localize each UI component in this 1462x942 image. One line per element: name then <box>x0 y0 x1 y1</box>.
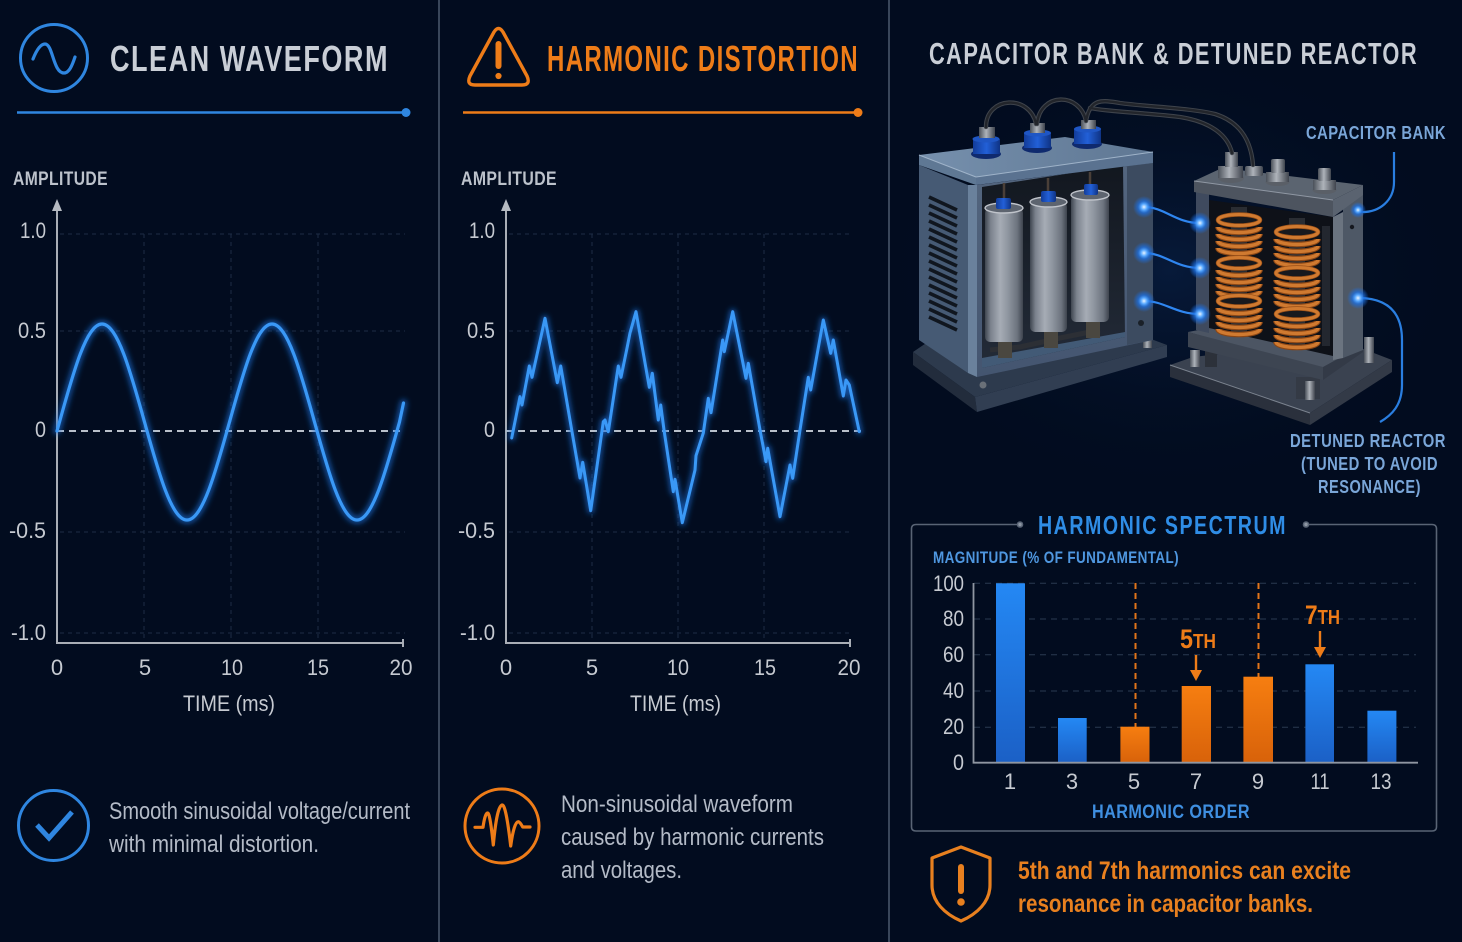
bar: order 9 <box>1243 677 1273 763</box>
y tick labels <box>458 218 495 645</box>
y axis values: 80 <box>943 606 964 631</box>
icon: warning triangle <box>469 28 528 85</box>
annotation: 5th: 5TH <box>1180 624 1216 654</box>
y tick labels: -0.5 <box>458 518 495 543</box>
x axis values: 13 <box>1370 769 1392 794</box>
x tick labels: 15 <box>307 655 329 680</box>
line chart: clean sine waveform <box>9 169 412 716</box>
reactor legs and bolts <box>1190 337 1374 400</box>
x tick labels: 20 <box>838 655 860 680</box>
clean sine curve <box>57 324 404 520</box>
illustration: detuned reactor <box>1170 152 1392 425</box>
y axis values: 100 <box>933 571 964 596</box>
glowing connections between units <box>1133 196 1211 325</box>
capacitor cylinders <box>985 172 1109 358</box>
heading: clean waveform: CLEAN WAVEFORM <box>110 38 389 79</box>
y axis with arrow <box>501 199 850 647</box>
x tick labels <box>51 655 412 680</box>
text: resonance warning <box>1018 857 1351 918</box>
text: clean waveform description: Smooth sinusoidal voltage/current <box>109 798 410 825</box>
zero reference line <box>506 430 866 432</box>
y tick labels: 1.0 <box>20 218 46 243</box>
x axis values <box>1004 769 1392 794</box>
y tick labels: 0 <box>484 417 495 442</box>
y tick labels: 0.5 <box>467 318 495 343</box>
cabinet terminals <box>971 120 1102 159</box>
annotation: 5th <box>1180 624 1216 681</box>
x axis values: 1 <box>1004 769 1016 794</box>
bar: order 13 <box>1367 711 1396 763</box>
y axis values: 40 <box>943 678 964 703</box>
bar: order 1 <box>996 583 1025 763</box>
y tick labels: 0 <box>35 417 46 442</box>
chart frame <box>912 522 1436 831</box>
axis label: amplitude: AMPLITUDE <box>461 169 557 190</box>
callout: detuned reactor: RESONANCE) <box>1318 477 1421 497</box>
x axis values: 5 <box>1128 769 1140 794</box>
y tick labels: -1.0 <box>460 620 495 645</box>
text: resonance warning: resonance in capacitor banks. <box>1018 890 1313 918</box>
cabinet vent slots <box>929 197 957 330</box>
heading rule <box>463 108 862 117</box>
y tick labels <box>9 218 46 645</box>
annotation: 7th <box>1305 600 1340 658</box>
axis label: time: TIME (ms) <box>183 691 275 716</box>
y tick labels: 0.5 <box>18 318 46 343</box>
zero reference line <box>57 430 403 432</box>
text: distortion description: Non-sinusoidal waveform <box>561 791 793 818</box>
y tick labels: -1.0 <box>11 620 46 645</box>
x tick labels: 10 <box>667 655 689 680</box>
text: clean waveform description: with minimal distortion. <box>108 831 319 858</box>
y axis values: 60 <box>943 642 964 667</box>
resonance dashed markers <box>1136 583 1258 727</box>
x axis values: 3 <box>1066 769 1078 794</box>
axis label: amplitude: AMPLITUDE <box>13 169 108 190</box>
reactor copper coils <box>1218 207 1318 348</box>
x tick labels: 0 <box>500 655 512 680</box>
heading: harmonic spectrum: HARMONIC SPECTRUM <box>1038 510 1287 540</box>
x axis values: 7 <box>1190 769 1202 794</box>
x axis title: HARMONIC ORDER <box>1092 802 1250 823</box>
callout: detuned reactor <box>1290 287 1446 497</box>
text: resonance warning: 5th and 7th harmonics can excite <box>1018 857 1351 885</box>
axis label: time: TIME (ms) <box>630 691 721 716</box>
panel: capacitor bank and detuned reactor <box>912 36 1446 921</box>
callout: capacitor bank <box>1306 123 1446 218</box>
heading rule <box>17 108 410 117</box>
distorted curve <box>512 312 859 523</box>
x tick labels <box>500 655 860 680</box>
y axis values <box>933 571 964 775</box>
chart axes <box>974 583 1418 763</box>
x tick labels: 5 <box>586 655 598 680</box>
text: distortion description: and voltages. <box>561 857 682 884</box>
annotation: 7th: 7TH <box>1305 600 1340 630</box>
x tick labels: 10 <box>221 655 243 680</box>
bar: order 5 <box>1120 727 1150 763</box>
x tick labels: 0 <box>51 655 63 680</box>
panel: harmonic distortion <box>458 28 866 884</box>
text: distortion description: caused by harmonic currents <box>561 824 824 851</box>
cables between terminals <box>986 100 1253 165</box>
x tick labels: 15 <box>754 655 776 680</box>
panel: clean waveform <box>9 24 412 860</box>
y tick labels: 1.0 <box>469 218 495 243</box>
illustration: capacitor bank cabinet <box>913 120 1167 412</box>
panel: harmonic spectrum chart <box>912 510 1436 831</box>
icon: warning shield <box>932 847 990 921</box>
y tick labels: -0.5 <box>9 518 46 543</box>
x tick labels: 5 <box>139 655 151 680</box>
bar: order 3 <box>1058 718 1087 763</box>
y axis values: 0 <box>953 750 964 775</box>
line chart: distorted waveform <box>458 169 866 716</box>
x axis values: 9 <box>1252 769 1264 794</box>
reactor terminals <box>1218 152 1336 194</box>
icon: sine wave in circle <box>20 24 88 92</box>
text: clean waveform description <box>108 798 410 858</box>
y axis title: MAGNITUDE (% OF FUNDAMENTAL) <box>933 548 1179 567</box>
text: distortion description <box>561 791 824 884</box>
bar: order 11 <box>1305 664 1334 763</box>
bar: order 7 <box>1182 686 1211 763</box>
x tick labels: 20 <box>390 655 412 680</box>
heading: harmonic distortion: HARMONIC DISTORTION <box>547 38 859 79</box>
icon: distorted pulse in circle <box>465 789 539 863</box>
x axis values: 11 <box>1310 769 1330 794</box>
y axis values: 20 <box>943 714 964 739</box>
icon: check mark in circle <box>18 790 88 860</box>
y axis with arrow <box>52 199 403 647</box>
